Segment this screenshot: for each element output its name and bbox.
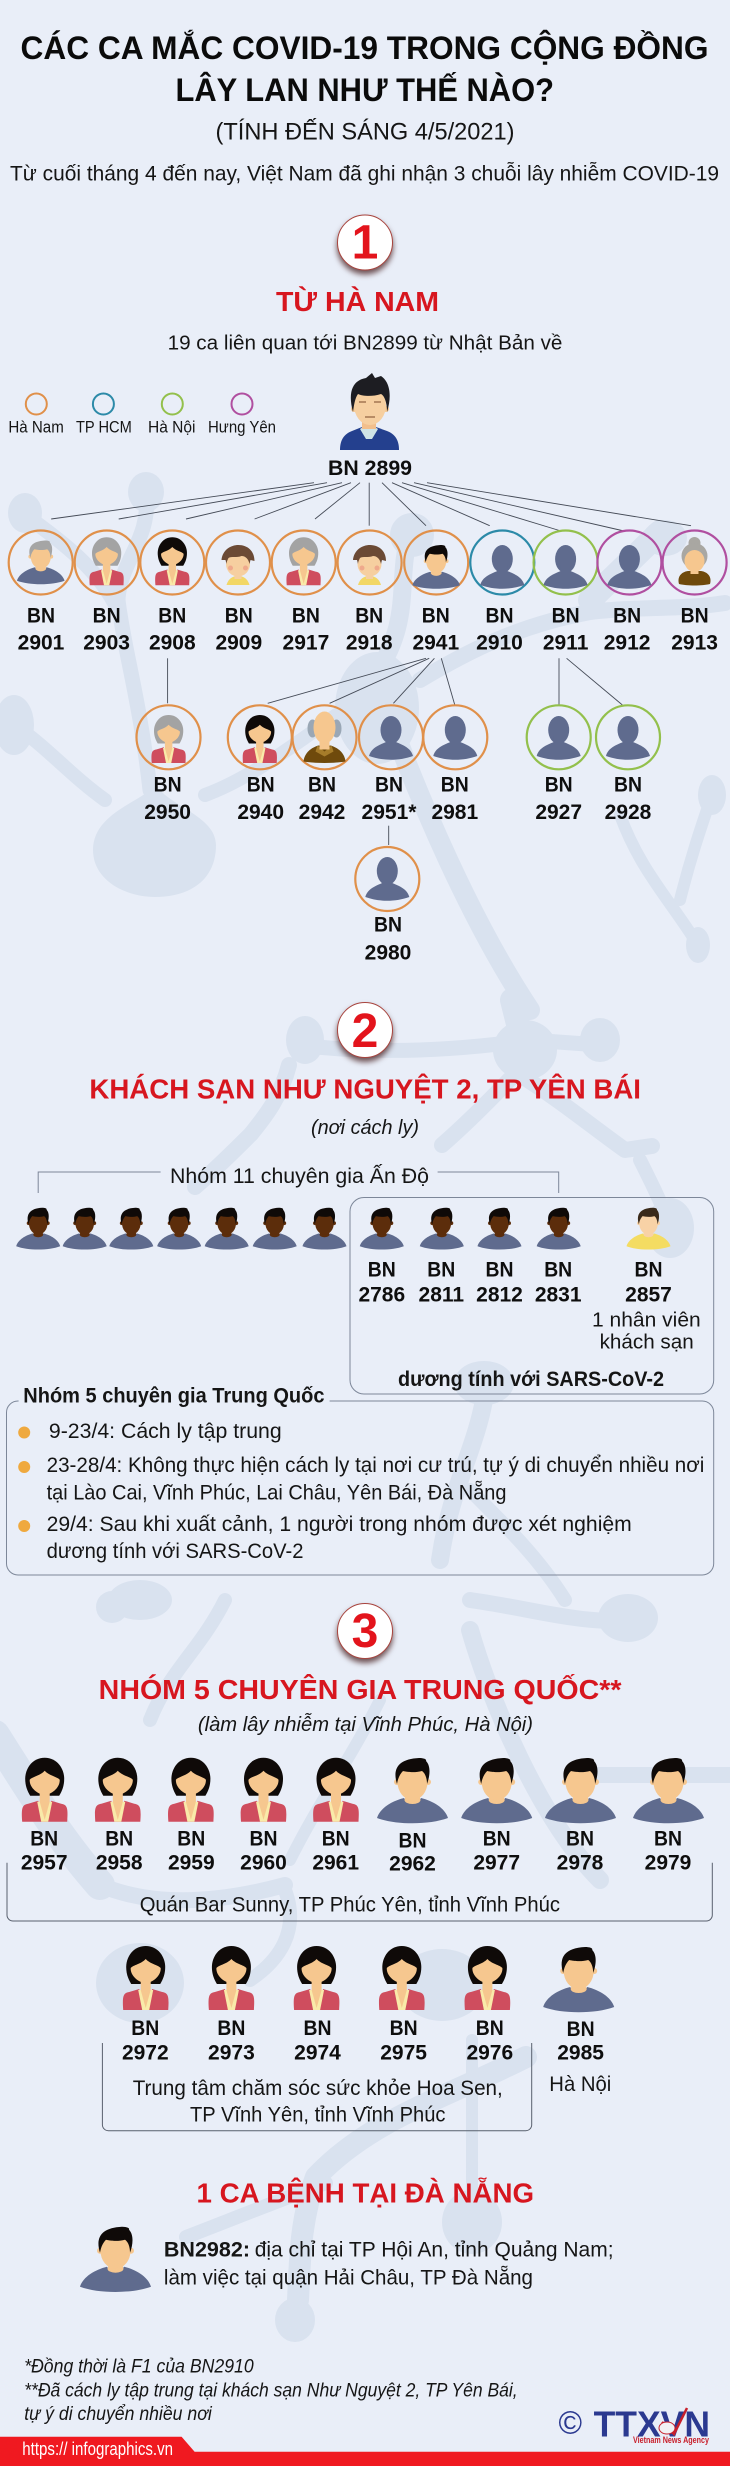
case BN 2973: BN (217, 2017, 245, 2040)
footnotes: **Đã cách ly tập trung tại khách sạn Như Nguyệt 2, TP Yên Bái, (24, 2381, 518, 2402)
panel: 5 Chinese experts: 29/4: Sau khi xuất cảnh, 1 người trong nhóm được xét nghiệm (47, 1513, 632, 1536)
case BN 2908: 2908 (149, 632, 196, 654)
case BN 2977: BN (483, 1828, 511, 1851)
case BN 2962: 2962 (389, 1853, 436, 1876)
case BN 2911: 2911 (543, 632, 589, 654)
case BN 2974 (294, 1946, 341, 2064)
footnotes (24, 2356, 518, 2425)
case BN 2928 (596, 705, 660, 824)
case BN 2812: 2812 (476, 1284, 523, 1307)
case BN 2811: 2811 (419, 1284, 464, 1307)
group label: 11 Indian experts (38, 1165, 559, 1193)
case BN 2972: 2972 (122, 2041, 169, 2064)
case BN 2958: BN (105, 1828, 133, 1851)
case BN 2786: BN (368, 1259, 396, 1282)
case BN 2975: BN (390, 2017, 418, 2040)
case BN 2962: BN (398, 1829, 426, 1852)
case BN 2959 (168, 1758, 215, 1874)
case BN 2857 hotel staff: BN (634, 1259, 662, 1282)
legend: TP HCM (76, 418, 132, 437)
case BN 2975 (379, 1946, 427, 2064)
case BN 2978: 2978 (557, 1851, 604, 1874)
group label: 11 Indian experts: Nhóm 11 chuyên gia Ấn Độ (170, 1165, 429, 1188)
case BN 2950: 2950 (144, 801, 191, 824)
case BN 2978 (545, 1758, 616, 1874)
case BN 2909: 2909 (215, 632, 262, 654)
case BN 2980: 2980 (365, 941, 411, 964)
positive cases box (350, 1198, 714, 1394)
case BN 2928: 2928 (605, 801, 652, 824)
footnotes: *Đồng thời là F1 của BN2910 (24, 2356, 254, 2377)
logo TTXVN: Vietnam News Agency (633, 2435, 709, 2445)
number badge 3: 3 (352, 1605, 378, 1658)
case BN 2903: BN (93, 604, 121, 628)
case BN 2980: BN (374, 914, 402, 937)
Da Nang case text (164, 2239, 614, 2289)
case BN 2910 (470, 530, 534, 654)
case BN 2940: 2940 (237, 801, 284, 824)
case BN 2908: BN (158, 604, 186, 628)
case BN 2910: BN (486, 604, 514, 628)
footer band (0, 2437, 730, 2466)
case BN 2981: 2981 (431, 801, 478, 824)
case BN 2912: 2912 (604, 632, 650, 654)
case BN 2978: BN (566, 1828, 594, 1851)
case BN 2942: 2942 (299, 801, 345, 824)
case BN 2950: BN (154, 774, 182, 797)
Da Nang case text: BN2982: (164, 2239, 250, 2262)
case BN 2981: BN (441, 774, 469, 797)
subtitle date: (TÍNH ĐẾN SÁNG 4/5/2021) (216, 117, 514, 145)
case BN 2917: BN (292, 604, 320, 628)
case BN 2901: 2901 (18, 632, 65, 654)
case BN 2980 (355, 847, 419, 964)
panel: 5 Chinese experts: 23-28/4: Không thực hiện cách ly tại nơi cư trú, tự ý di chuyển nhiều nơi (47, 1454, 704, 1477)
case BN 2960: 2960 (240, 1851, 287, 1874)
case BN 2786: 2786 (358, 1284, 405, 1307)
case BN 2976 (465, 1946, 513, 2064)
case BN 2985 (543, 1947, 614, 2096)
background virus pattern (0, 472, 730, 2342)
case BN 2941 (404, 530, 468, 654)
legend: Hưng Yên (208, 418, 276, 437)
panel: 5 Chinese experts: dương tính với SARS-CoV-2 (47, 1540, 303, 1563)
title: LÂY LAN NHƯ THẾ NÀO? (176, 72, 554, 108)
positive label: dương tính với SARS-CoV-2 (398, 1368, 664, 1391)
case BN 2928: BN (614, 774, 642, 797)
case BN 2831: 2831 (535, 1284, 582, 1307)
case BN 2857 hotel staff (592, 1208, 701, 1353)
case BN 2857 hotel staff: 2857 (625, 1284, 672, 1307)
case BN 2786 (358, 1208, 405, 1307)
icon: patient BN 2982 (80, 2227, 151, 2292)
case BN 2941: BN (422, 604, 450, 628)
case BN 2979: 2979 (645, 1851, 691, 1874)
case BN 2976: 2976 (466, 2041, 513, 2064)
case BN 2912 (597, 530, 661, 654)
case BN 2985: 2985 (557, 2041, 604, 2064)
footnotes: tự ý di chuyển nhiều nơi (24, 2404, 213, 2425)
heading Da Nang: 1 CA BỆNH TẠI ĐÀ NẴNG (196, 2177, 534, 2209)
Da Nang case text: địa chỉ tại TP Hội An, tỉnh Quảng Nam; (255, 2239, 614, 2262)
panel: 5 Chinese experts (6, 1385, 714, 1575)
case BN 2917 (272, 530, 336, 654)
case BN 2911: BN (552, 604, 580, 628)
bracket: Bar Sunny group (7, 1863, 712, 1921)
case BN 2976: BN (476, 2017, 504, 2040)
bracket: Bar Sunny group: Quán Bar Sunny, TP Phúc Yên, tỉnh Vĩnh Phúc (140, 1894, 560, 1917)
legend: Hà Nam (8, 418, 64, 437)
case BN 2951: BN (375, 774, 403, 797)
case BN 2979: BN (654, 1828, 682, 1851)
case BN 2977 (461, 1758, 532, 1874)
case BN 2927 (527, 705, 591, 824)
case BN 2973 (208, 1946, 255, 2064)
case BN 2960: BN (250, 1828, 278, 1851)
row of Indian experts (16, 1208, 347, 1250)
case BN 2901 (9, 530, 73, 654)
case BN 2959: 2959 (168, 1851, 215, 1874)
Da Nang case text: làm việc tại quận Hải Châu, TP Đà Nẵng (164, 2266, 533, 2289)
footer band: https:// infographics.vn (22, 2439, 173, 2459)
case BN 2913 (663, 530, 727, 654)
number badge 1: 1 (352, 216, 378, 269)
case BN 2857 hotel staff: 1 nhân viên (592, 1309, 701, 1331)
bracket: Hoa Sen health centre group (102, 2043, 532, 2131)
index patient BN 2899 (328, 373, 412, 480)
case BN 2918 (338, 530, 402, 654)
case BN 2975: 2975 (380, 2041, 427, 2064)
case BN 2909 (206, 530, 270, 654)
number badge 3 (338, 1604, 392, 1658)
case BN 2958 (95, 1758, 143, 1874)
number badge 1 (338, 215, 392, 270)
case BN 2977: 2977 (473, 1851, 520, 1874)
case BN 2812 (476, 1208, 523, 1307)
case BN 2962 (377, 1758, 448, 1876)
case BN 2913: 2913 (671, 632, 718, 654)
number badge 2: 2 (352, 1005, 378, 1058)
case BN 2918: 2918 (346, 632, 393, 654)
case BN 2909: BN (225, 604, 253, 628)
case BN 2951: 2951* (362, 801, 417, 824)
logo TTXVN: © (559, 2404, 583, 2440)
case BN 2979 (633, 1758, 704, 1874)
case BN 2961: BN (322, 1828, 350, 1851)
case BN 2958: 2958 (96, 1851, 143, 1874)
case BN 2941: 2941 (412, 632, 459, 654)
case BN 2831: BN (544, 1259, 572, 1282)
case BN 2831 (535, 1208, 582, 1307)
connector lines from BN 2899 (51, 483, 691, 531)
case BN 2972: BN (131, 2017, 159, 2040)
title: CÁC CA MẮC COVID-19 TRONG CỘNG ĐỒNG (20, 30, 708, 66)
case BN 2942: BN (308, 774, 336, 797)
case BN 2911 (534, 530, 598, 654)
panel: 5 Chinese experts: 9-23/4: Cách ly tập trung (49, 1420, 282, 1443)
case BN 2974: BN (304, 2017, 332, 2040)
case BN 2985: Hà Nội (549, 2073, 611, 2096)
case BN 2940: BN (247, 774, 275, 797)
index patient BN 2899: BN 2899 (328, 457, 412, 480)
legend: Hà Nội (148, 418, 196, 437)
case BN 2950 (136, 705, 200, 824)
case BN 2981 (423, 705, 487, 824)
section 3 note: (làm lây nhiễm tại Vĩnh Phúc, Hà Nội) (198, 1713, 533, 1736)
case BN 2812: BN (486, 1259, 514, 1282)
number badge 2 (338, 1002, 392, 1058)
case BN 2951 (359, 705, 423, 824)
case BN 2942 (292, 705, 356, 824)
case BN 2973: 2973 (208, 2041, 255, 2064)
heading section 3: NHÓM 5 CHUYÊN GIA TRUNG QUỐC** (99, 1673, 622, 1705)
case BN 2913: BN (681, 604, 709, 628)
case BN 2857 hotel staff: khách sạn (600, 1331, 694, 1353)
case BN 2811: BN (427, 1259, 455, 1282)
case BN 2918: BN (355, 604, 383, 628)
logo TTXVN: TTXVN (594, 2404, 710, 2445)
case BN 2960 (240, 1758, 287, 1874)
case BN 2940 (228, 705, 292, 824)
bracket: Hoa Sen health centre group: Trung tâm chăm sóc sức khỏe Hoa Sen, (133, 2077, 503, 2100)
case BN 2957: BN (30, 1828, 58, 1851)
case BN 2811 (419, 1208, 464, 1307)
case BN 2901: BN (27, 604, 55, 628)
case BN 2927: 2927 (535, 801, 582, 824)
case BN 2974: 2974 (294, 2041, 341, 2064)
heading section 2: KHÁCH SẠN NHƯ NGUYỆT 2, TP YÊN BÁI (89, 1074, 641, 1105)
section 2 note: (nơi cách ly) (311, 1117, 419, 1139)
case BN 2957 (21, 1758, 68, 1874)
case BN 2912: BN (613, 604, 641, 628)
heading section 1: TỪ HÀ NAM (276, 286, 439, 317)
case BN 2957: 2957 (21, 1851, 68, 1874)
panel: 5 Chinese experts: Nhóm 5 chuyên gia Trung Quốc (23, 1385, 325, 1408)
case BN 2908 (140, 530, 204, 654)
case BN 2961: 2961 (312, 1851, 359, 1874)
case BN 2903: 2903 (83, 632, 130, 654)
case BN 2903 (75, 530, 139, 654)
panel: 5 Chinese experts: tại Lào Cai, Vĩnh Phúc, Lai Châu, Yên Bái, Đà Nẵng (47, 1481, 506, 1504)
case BN 2985: BN (567, 2018, 595, 2041)
legend (8, 394, 276, 437)
intro sentence: Từ cuối tháng 4 đến nay, Việt Nam đã ghi nhận 3 chuỗi lây nhiễm COVID-19 (10, 161, 719, 186)
case BN 2961 (312, 1758, 359, 1874)
case BN 2959: BN (177, 1828, 205, 1851)
title (20, 30, 708, 108)
case BN 2917: 2917 (283, 632, 329, 654)
connector lines second generation (168, 658, 622, 845)
case BN 2910: 2910 (476, 632, 523, 654)
section 1 description: 19 ca liên quan tới BN2899 từ Nhật Bản về (168, 332, 562, 354)
bracket: Hoa Sen health centre group: TP Vĩnh Yên, tỉnh Vĩnh Phúc (190, 2104, 446, 2127)
case BN 2927: BN (545, 774, 573, 797)
case BN 2972 (122, 1946, 169, 2064)
